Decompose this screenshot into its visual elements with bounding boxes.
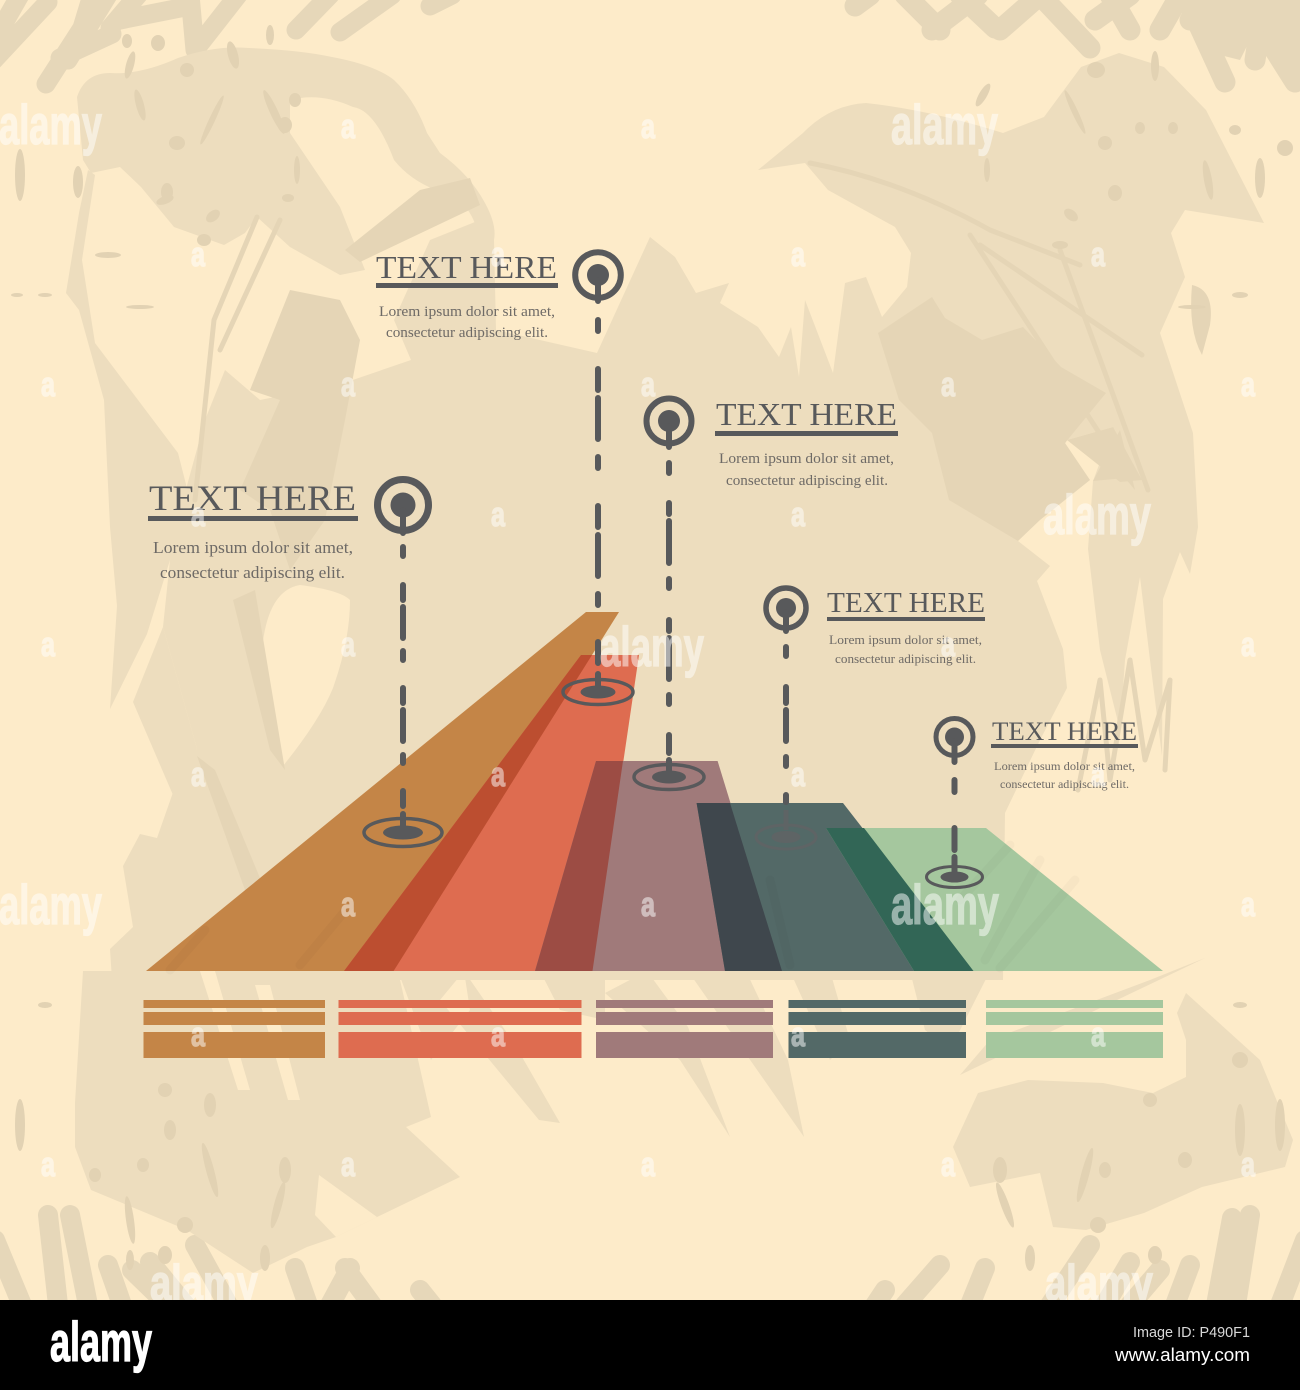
- callout 3: consectetur adipiscing elit.: [726, 473, 888, 489]
- callout 3: Lorem ipsum dolor sit amet,: [719, 451, 894, 467]
- chart: green ramps: [170, 803, 1163, 971]
- callout 1: [148, 478, 358, 582]
- ramp: dark green: [697, 803, 974, 971]
- watermarks: alamy: [891, 93, 998, 156]
- pointer 3: [634, 398, 704, 790]
- callout 2: Lorem ipsum dolor sit amet,: [379, 304, 555, 320]
- callout 2: TEXT HERE: [376, 249, 557, 285]
- left bird thin strip and streak: [66, 170, 190, 709]
- overlap: brown and red: [344, 655, 592, 971]
- watermarks: alamy: [0, 873, 102, 936]
- ramp: mauve: [535, 761, 782, 971]
- callout 3: [715, 396, 898, 489]
- central and right mass: [110, 53, 1264, 980]
- watermarks: a: [641, 108, 656, 146]
- chart: perspective ramps: [146, 612, 782, 971]
- ramp: red: [344, 655, 639, 971]
- footer logo: alamy: [50, 1310, 152, 1373]
- watermarks: a: [641, 366, 656, 404]
- cream lens: [263, 585, 350, 766]
- top-right scribble: [855, 0, 1300, 82]
- watermarks: alamy: [600, 615, 704, 678]
- callout 4: consectetur adipiscing elit.: [835, 652, 976, 666]
- watermarks: a: [491, 496, 506, 534]
- watermarks: alamy: [1045, 1255, 1153, 1311]
- watermarks: a: [191, 1016, 206, 1054]
- callout 4: TEXT HERE: [827, 588, 985, 619]
- callout 5: Lorem ipsum dolor sit amet,: [994, 761, 1135, 773]
- watermarks: a: [641, 1146, 656, 1184]
- watermarks: a: [941, 366, 956, 404]
- ramp: light green: [826, 828, 1163, 971]
- watermarks: a: [341, 886, 356, 924]
- darker patches: [197, 178, 1211, 890]
- callout 3: TEXT HERE: [716, 396, 897, 432]
- callout 4: Lorem ipsum dolor sit amet,: [829, 633, 982, 647]
- cream wedge in lower left blob: [315, 1175, 377, 1237]
- watermarks: a: [41, 366, 56, 404]
- small streak near the left margin: [133, 627, 197, 795]
- watermarks: a: [491, 756, 506, 794]
- website: www.alamy.com: [1114, 1345, 1250, 1365]
- bottom-right scribble: [875, 1215, 1300, 1305]
- watermarks: a: [641, 886, 656, 924]
- legend: brown: [144, 1000, 325, 1058]
- callout 1: consectetur adipiscing elit.: [160, 563, 345, 582]
- watermarks: a: [191, 756, 206, 794]
- pointer 4: [766, 588, 806, 802]
- watermarks: a: [1241, 366, 1256, 404]
- pointer 4 stub behind the teal ramp: [783, 796, 789, 803]
- watermarks: a: [1241, 626, 1256, 664]
- callout 2: consectetur adipiscing elit.: [386, 325, 548, 341]
- bottom-left scribble: [0, 1215, 432, 1305]
- watermarks: alamy: [891, 873, 999, 936]
- legend: mauve: [596, 1000, 773, 1058]
- callout 5: consectetur adipiscing elit.: [1000, 779, 1129, 791]
- lower right blob: [953, 993, 1293, 1230]
- faint pointer 4 base: [756, 810, 816, 849]
- watermarks: a: [491, 1016, 506, 1054]
- callout 1: Lorem ipsum dolor sit amet,: [153, 538, 353, 557]
- watermarks: a: [191, 236, 206, 274]
- lower left blob: [75, 971, 460, 1273]
- watermarks: a: [1091, 236, 1106, 274]
- watermarks: a: [791, 1016, 806, 1054]
- image id: Image ID: P490F1: [1133, 1324, 1250, 1341]
- watermarks: a: [341, 626, 356, 664]
- watermarks: a: [1091, 1016, 1106, 1054]
- pointer 5: [926, 718, 982, 888]
- pointer 1: [364, 480, 442, 846]
- legend bars: [144, 1000, 1163, 1058]
- watermarks: a: [941, 1146, 956, 1184]
- footer bar: [0, 1300, 1300, 1390]
- watermarks: a: [1091, 756, 1106, 794]
- cream streaks: [200, 971, 300, 1100]
- left bird head and neck: [77, 47, 495, 275]
- watermarks: a: [41, 626, 56, 664]
- watermarks: a: [341, 1146, 356, 1184]
- watermarks: alamy: [0, 93, 102, 156]
- overlap: red and mauve: [535, 761, 623, 971]
- leaves beneath chart: [398, 958, 1205, 1137]
- watermarks: alamy: [1043, 483, 1151, 546]
- legend: light green: [986, 1000, 1163, 1058]
- callout 1: TEXT HERE: [149, 478, 356, 518]
- callout 5: TEXT HERE: [992, 717, 1137, 746]
- watermarks: a: [341, 366, 356, 404]
- overlap: dark and light green: [826, 828, 974, 971]
- watermarks: a: [791, 496, 806, 534]
- watermarks: a: [791, 236, 806, 274]
- legend: dark green: [788, 1000, 966, 1058]
- faint streaks through the ramps: [170, 845, 1075, 970]
- watermarks: alamy: [150, 1255, 258, 1311]
- watermarks: a: [941, 626, 956, 664]
- top-left scribble: [0, 0, 452, 84]
- watermarks: a: [191, 496, 206, 534]
- overlap: mauve and dark green: [697, 803, 782, 971]
- callout 4: [827, 588, 985, 666]
- callout 5: [991, 717, 1138, 791]
- watermarks: a: [791, 756, 806, 794]
- pointer 2: [563, 252, 633, 704]
- watermarks: a: [1241, 1146, 1256, 1184]
- legend: red: [338, 1000, 582, 1058]
- watermarks: a: [1241, 886, 1256, 924]
- ramp: brown: [146, 612, 619, 971]
- watermarks: a: [41, 1146, 56, 1184]
- callout 2: [376, 249, 558, 341]
- feather strokes: [195, 163, 1170, 790]
- watermarks: a: [491, 236, 506, 274]
- watermarks: a: [341, 108, 356, 146]
